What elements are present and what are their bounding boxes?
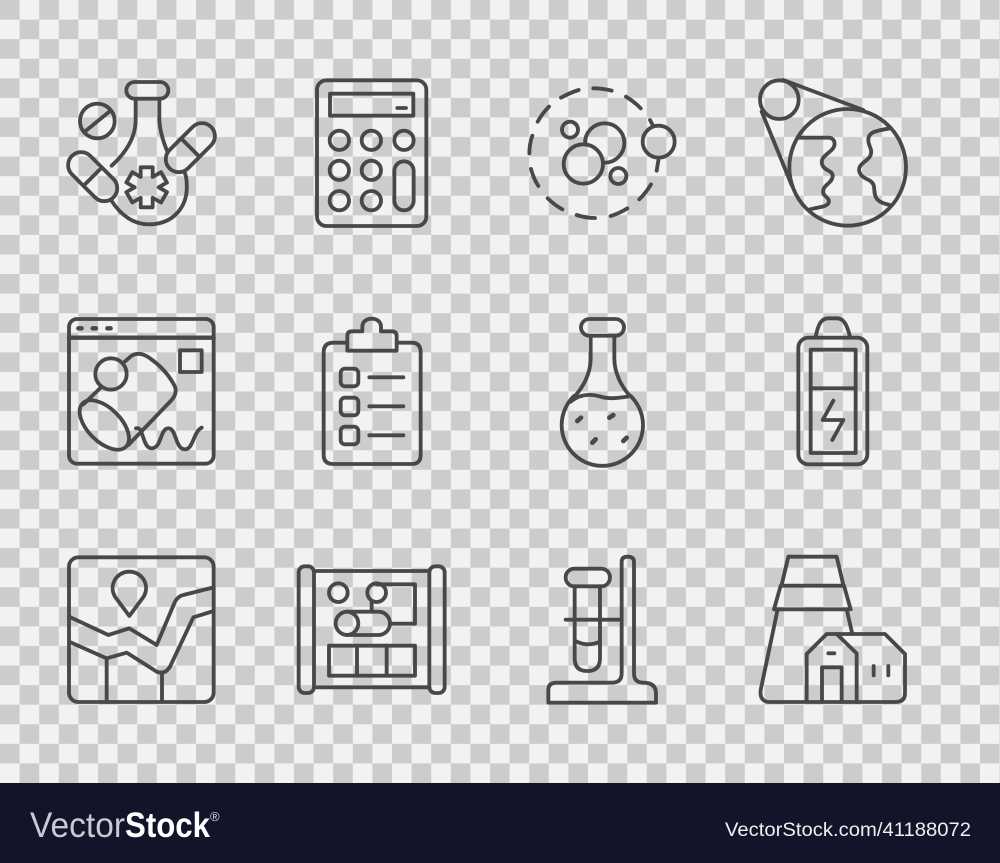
footer bar (0, 783, 1000, 863)
icon: planet and moon eclipse (760, 80, 906, 226)
footer logo: VectorStock: Vector (30, 806, 125, 845)
footer logo: VectorStock (30, 806, 220, 845)
icon: clipboard checklist (324, 319, 421, 464)
icon grid (63, 80, 906, 703)
icon: round bottom flask with liquid (562, 319, 643, 466)
icon: calculator (317, 80, 426, 226)
icon: power plant cooling tower (761, 557, 905, 702)
icon: test tube on stand (548, 557, 656, 703)
footer image id: VectorStock.com/41188072 (725, 819, 971, 841)
icon: atom cell with orbit (529, 88, 675, 218)
footer logo: VectorStock: ® (210, 809, 220, 824)
footer logo: VectorStock: Stock (125, 806, 210, 845)
icon: map with location pin (69, 557, 214, 702)
icon: browser window with ultrasound scanner (69, 319, 214, 464)
icon: battery charging (798, 318, 867, 464)
icon: blueprint scroll (299, 566, 445, 693)
icon: flask with pills (63, 82, 220, 224)
